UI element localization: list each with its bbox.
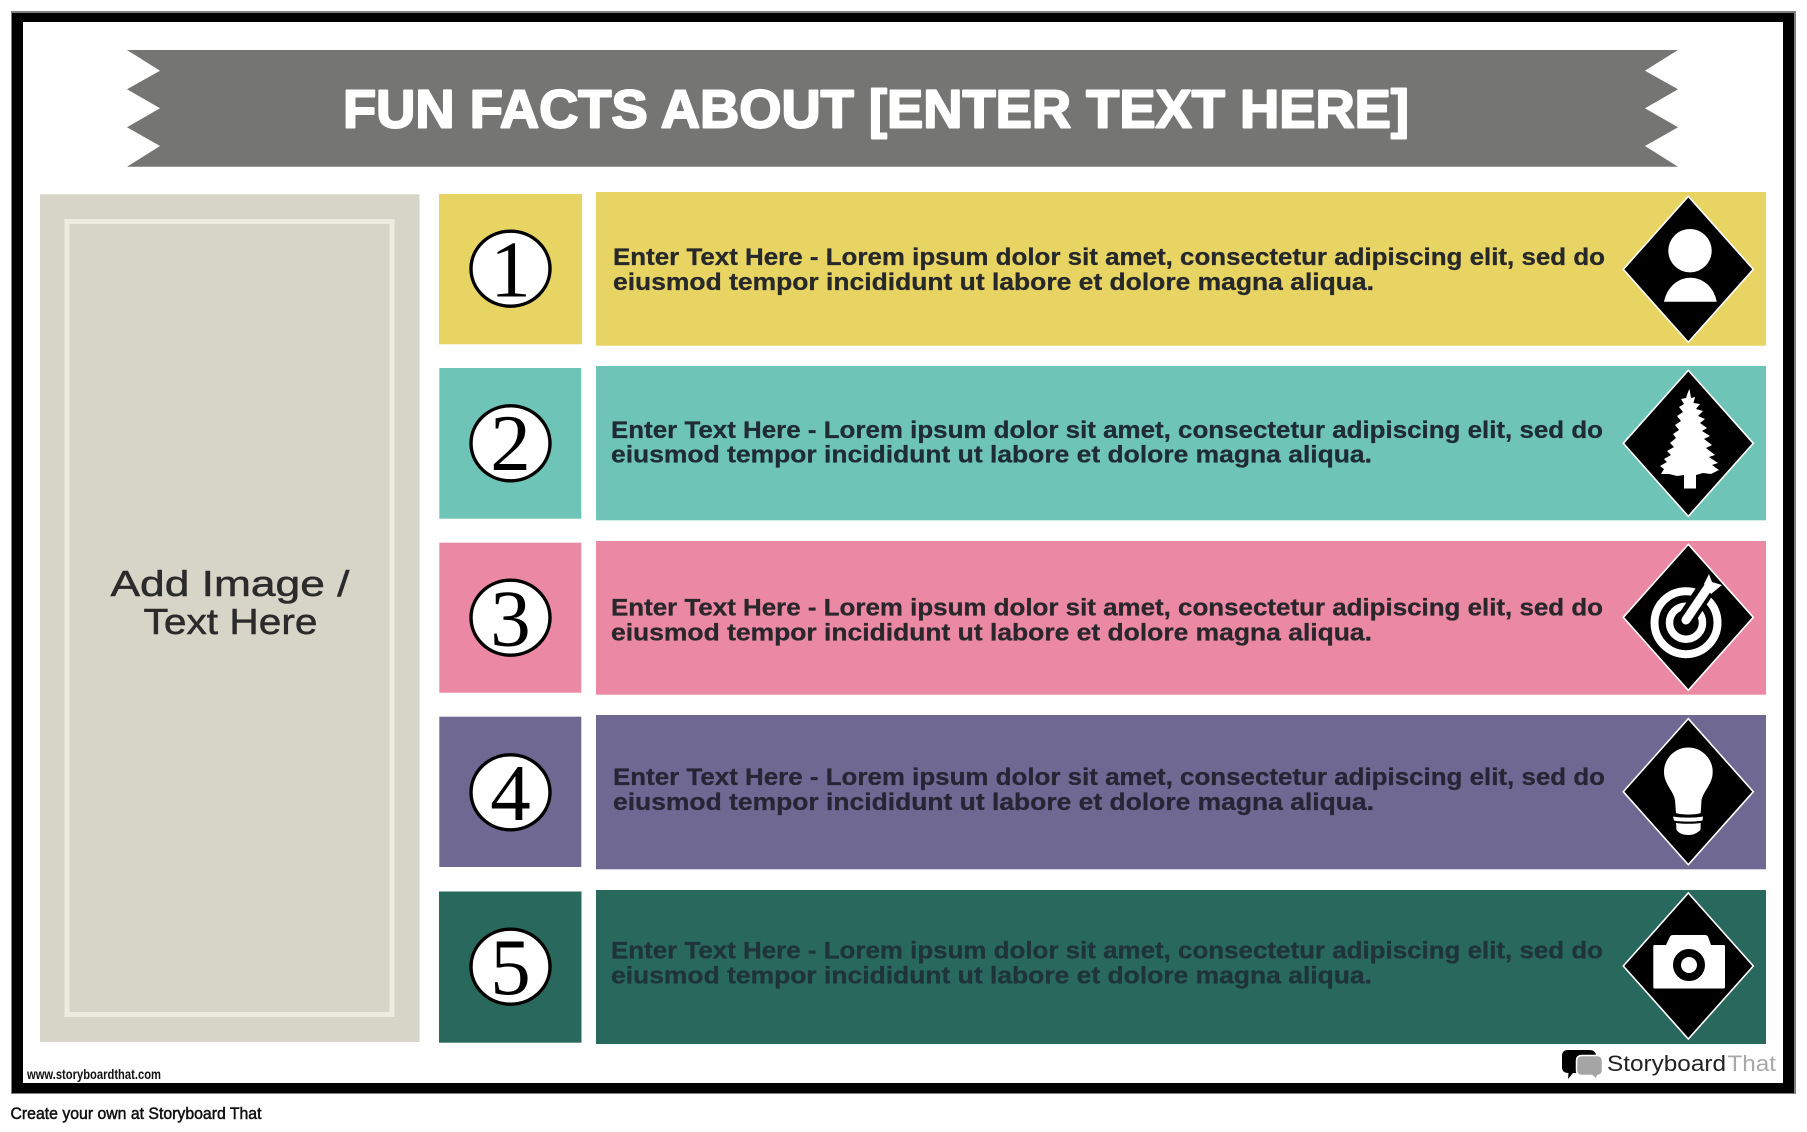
number box 5: 5: [490, 922, 531, 1012]
icon: camera: [1623, 893, 1753, 1039]
text bar 3: Enter Text Here - Lorem ipsum dolor sit amet, consectetur adipiscing elit, sed do: [611, 595, 1603, 622]
icon: speech bubbles: [1562, 1050, 1602, 1079]
text bar 1: [596, 192, 1766, 346]
text bar 5: [596, 890, 1766, 1044]
text bar 2: [596, 366, 1766, 520]
placeholder text: Text Here: [144, 601, 318, 642]
text bar 4: eiusmod tempor incididunt ut labore et dolore magna aliqua.: [613, 789, 1374, 816]
website credit: www.storyboardthat.com: [26, 1067, 161, 1082]
text bar 1: eiusmod tempor incididunt ut labore et dolore magna aliqua.: [613, 269, 1374, 296]
text bar 2: Enter Text Here - Lorem ipsum dolor sit amet, consectetur adipiscing elit, sed do: [611, 417, 1603, 444]
number box 4: 4: [490, 748, 531, 838]
number box 1: [439, 194, 582, 344]
placeholder text: [110, 563, 350, 642]
panel: image placeholder: [40, 194, 420, 1042]
text bar 5: Enter Text Here - Lorem ipsum dolor sit amet, consectetur adipiscing elit, sed do: [611, 938, 1603, 964]
number box 5: [439, 892, 582, 1043]
wordmark: That: [1728, 1051, 1777, 1076]
icon: light bulb: [1623, 719, 1753, 865]
number box 3: 3: [490, 574, 531, 664]
text bar 4: Enter Text Here - Lorem ipsum dolor sit amet, consectetur adipiscing elit, sed do: [613, 764, 1605, 791]
footer text: Create your own at Storyboard That: [10, 1105, 262, 1123]
row 1: [439, 192, 1766, 346]
row 5: [439, 890, 1766, 1044]
number box 3: [439, 543, 581, 693]
number box 2: 2: [490, 398, 531, 488]
icon: person: [1623, 196, 1753, 342]
row 3: [439, 541, 1766, 695]
title: FUN FACTS ABOUT [ENTER TEXT HERE]: [343, 80, 1409, 140]
text bar 1: Enter Text Here - Lorem ipsum dolor sit amet, consectetur adipiscing elit, sed do: [613, 244, 1605, 271]
text bar 5: eiusmod tempor incididunt ut labore et dolore magna aliqua.: [611, 962, 1372, 990]
text bar 2: eiusmod tempor incididunt ut labore et dolore magna aliqua.: [611, 442, 1372, 468]
number box 2: [439, 368, 581, 519]
icon: pine tree: [1623, 370, 1753, 516]
number box 1: 1: [490, 224, 531, 314]
text bar 4: [596, 715, 1766, 869]
row 2: [439, 366, 1766, 520]
placeholder text: Add Image /: [110, 563, 350, 604]
row 4: [439, 715, 1766, 869]
number box 4: [439, 717, 581, 867]
wordmark: Storyboard: [1607, 1051, 1726, 1076]
text bar 3: [596, 541, 1766, 695]
icon: target with arrow: [1623, 544, 1753, 690]
wordmark: [1607, 1051, 1777, 1076]
title ribbon: [127, 50, 1678, 167]
text bar 3: eiusmod tempor incididunt ut labore et dolore magna aliqua.: [611, 620, 1372, 646]
logo: Storyboard That: [1562, 1050, 1777, 1079]
